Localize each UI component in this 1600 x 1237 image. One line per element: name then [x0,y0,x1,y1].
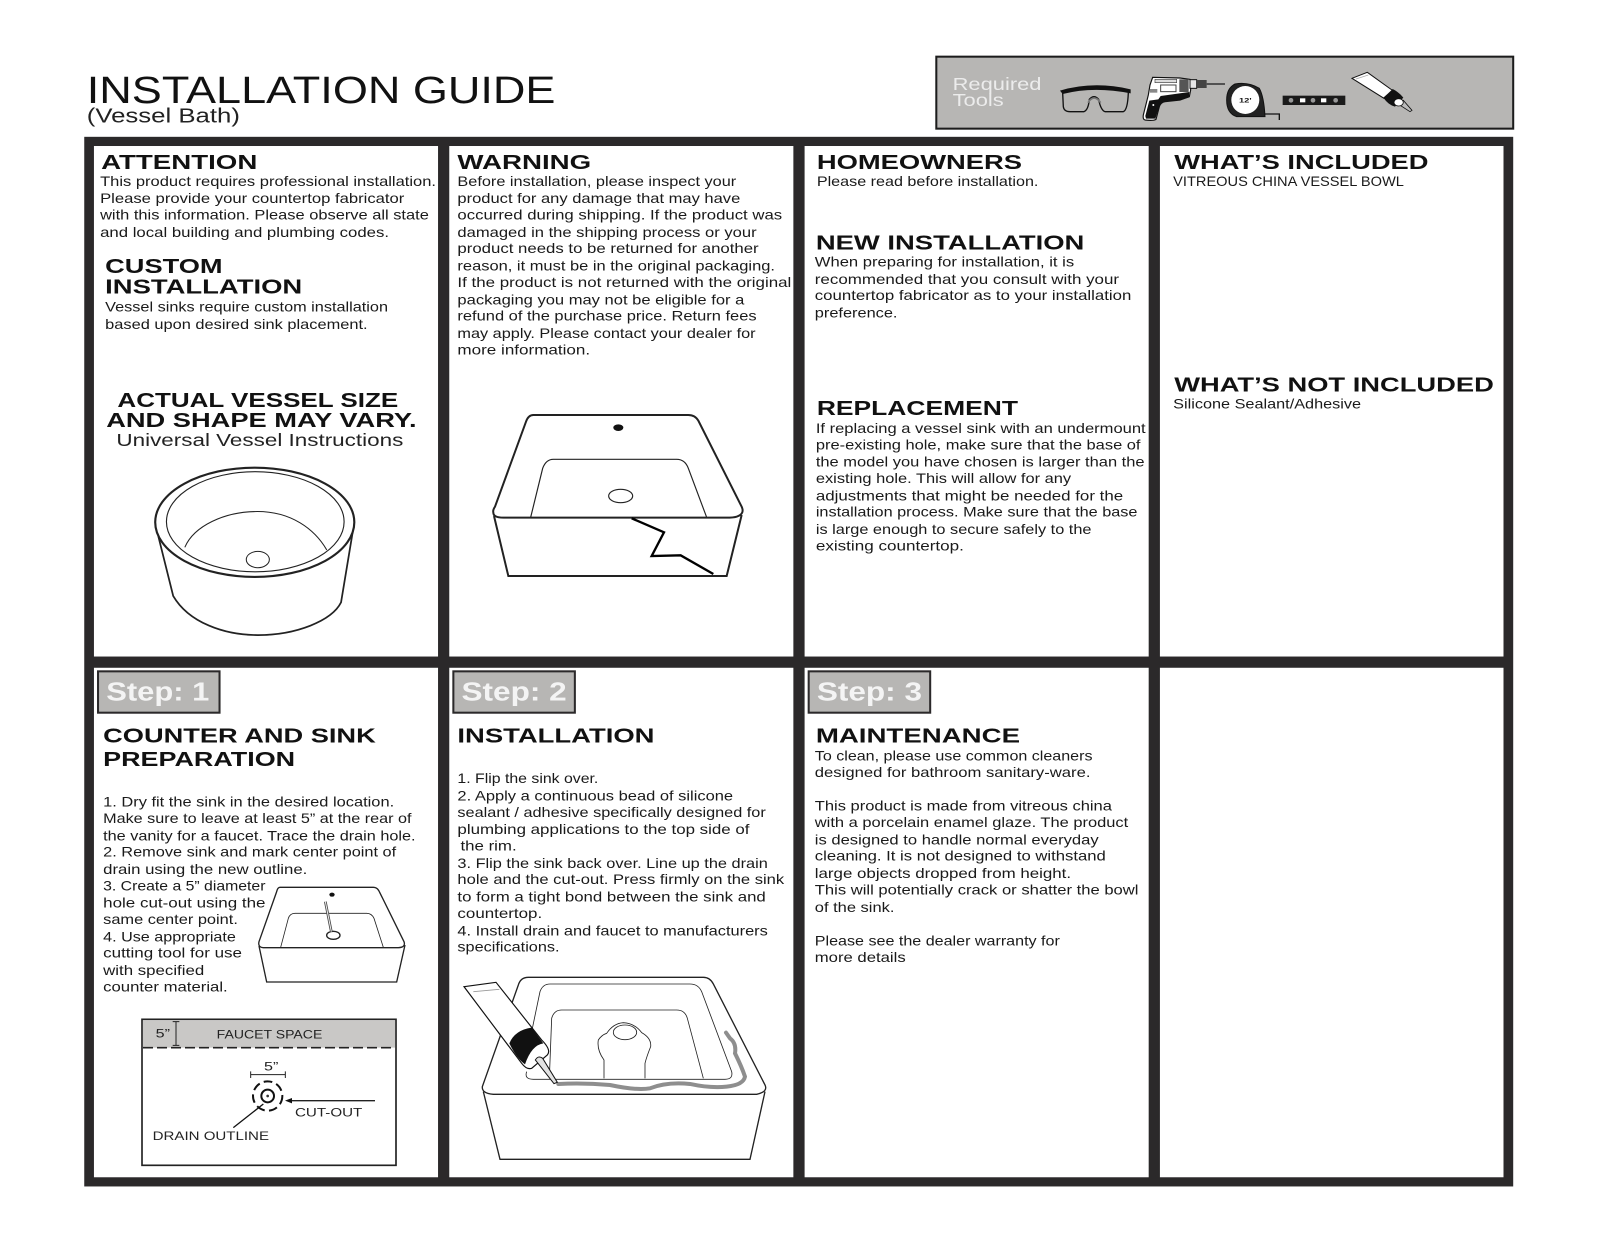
panel: step 2 [449,668,793,1177]
text: maintenance body: designed for bathroom sanitary-ware. [815,765,1090,780]
text: step 2 instructions: hole and the cut-out. Press firmly on the sink [457,872,784,887]
text: attention body: with this information. Please observe all state [99,208,429,223]
text: warning body: occurred during shipping. If the product was [457,208,782,223]
text: replacement body: If replacing a vessel sink with an undermount [816,421,1146,436]
text: included item: VITREOUS CHINA VESSEL BOWL [1173,174,1404,189]
text: attention body: and local building and plumbing codes. [100,225,389,240]
frame [84,137,1513,1186]
text: step 1 instructions: 2. Remove sink and mark center point of [103,845,396,860]
text: maintenance body: This product is made from vitreous china [815,799,1112,814]
heading: custom installation: CUSTOM [105,256,223,278]
text: step 2 instructions [457,771,784,955]
text: step 2 instructions: 1. Flip the sink over. [457,771,598,786]
text: step 1 instructions: counter material. [103,979,228,994]
badge: step 3 [809,671,930,713]
heading: what's not included: WHAT’S NOT INCLUDED [1174,374,1494,396]
text: step 1 instructions: drain using the new outline. [103,862,307,877]
text: replacement body: adjustments that might be needed for the [816,488,1123,503]
heading: actual vessel size: ACTUAL VESSEL SIZE [117,390,398,412]
panel: required tools [936,57,1513,129]
diagram: faucet space and cut-out: 5” [264,1060,278,1074]
text: warning body: Before installation, please inspect your [457,174,737,189]
heading: maintenance: MAINTENANCE [816,726,1020,748]
badge: step 3: Step: 3 [817,678,922,706]
heading: custom installation [105,256,302,298]
text: new installation body: When preparing for installation, it is [815,254,1074,269]
label: required tools: Tools [953,90,1004,110]
illustration: sink with sealant bead [482,977,766,1159]
heading: actual vessel size: AND SHAPE MAY VARY. [106,410,417,432]
text: maintenance body: is designed to handle normal everyday [815,832,1099,847]
text: warning body: damaged in the shipping process or your [457,225,757,240]
text: step 1 instructions: 3. Create a 5” diameter [103,878,266,893]
illustration: round vessel bowl [155,468,354,635]
heading: replacement: REPLACEMENT [817,398,1019,420]
heading: new installation: NEW INSTALLATION [816,233,1084,255]
badge: step 2 [453,671,575,713]
text: step 1 instructions: 4. Use appropriate [103,929,236,944]
icon: tape measure [1227,83,1279,120]
text: step 1 instructions: hole cut-out using the [103,896,265,911]
text: replacement body: the model you have chosen is larger than the [816,455,1145,470]
text: attention body [99,174,436,240]
diagram: faucet space and cut-out [142,1019,396,1165]
label: required tools: Required [953,74,1041,94]
text: maintenance body: of the sink. [815,900,894,915]
text: replacement body: installation process. Make sure that the base [816,505,1137,520]
text: maintenance body [814,749,1138,965]
text: warning body [457,174,791,357]
text: step 2 instructions: sealant / adhesive specifically designed for [457,805,766,820]
heading: custom installation: INSTALLATION [105,276,302,298]
icon: safety goggles [1060,85,1131,112]
text: warning body: refund of the purchase price. Return fees [457,309,757,324]
text: replacement body: existing countertop. [816,538,964,553]
text: homeowners note: Please read before installation. [817,174,1038,189]
title: (Vessel Bath) [87,106,240,128]
diagram: faucet space and cut-out: 5” [156,1027,170,1041]
text: step 1 instructions: same center point. [103,912,238,927]
badge: step 2: Step: 2 [462,678,567,706]
text: maintenance body: To clean, please use common cleaners [815,749,1093,764]
text: step 1 instructions: Make sure to leave at least 5” at the rear of [103,811,412,826]
text: maintenance body: cleaning. It is not designed to withstand [815,849,1106,864]
badge: step 1: Step: 1 [106,678,209,706]
text: warning body: reason, it must be in the original packaging. [457,259,775,274]
text: step 2 instructions: 2. Apply a continuous bead of silicone [457,789,733,804]
text: new installation body: countertop fabricator as to your installation [815,288,1131,303]
text: replacement body: existing hole. This will allow for any [816,471,1071,486]
title: INSTALLATION GUIDE [87,70,555,112]
badge: step 1 [98,671,220,713]
heading: counter and sink preparation: COUNTER AND SINK [103,726,376,748]
text: step 1 instructions: cutting tool for use [103,946,242,961]
heading: counter and sink preparation [103,726,376,771]
text: maintenance body: large objects dropped from height. [815,866,1071,881]
text: custom installation body: based upon desired sink placement. [105,317,368,332]
panel: warning [449,146,793,657]
panel: homeowners [805,146,1149,657]
text: step 2 instructions: countertop. [457,906,542,921]
text: warning body: If the product is not returned with the original [457,275,791,290]
text: step 1 instructions: the vanity for a faucet. Trace the drain hole. [103,828,416,843]
text: warning body: packaging you may not be eligible for a [457,292,745,307]
text: maintenance body: with a porcelain enamel glaze. The product [814,815,1128,830]
diagram: faucet space and cut-out: FAUCET SPACE [217,1027,322,1041]
icon: level [1283,96,1345,105]
panel: step 3 [805,668,1149,1177]
text: warning body: product needs to be returned for another [457,241,759,256]
text: maintenance body: This will potentially crack or shatter the bowl [815,882,1138,897]
text: warning body: may apply. Please contact your dealer for [457,326,756,341]
text: replacement body: is large enough to secure safely to the [816,522,1092,537]
text: warning body: product for any damage that may have [457,191,740,206]
text: custom installation body: Vessel sinks require custom installation [105,299,388,314]
heading: installation: INSTALLATION [457,726,655,748]
diagram: faucet space and cut-out: CUT-OUT [295,1106,363,1120]
text: step 1 instructions [102,795,416,994]
text: maintenance body: Please see the dealer warranty for [815,933,1060,948]
heading: what's included: WHAT’S INCLUDED [1174,152,1428,174]
text: warning body: more information. [457,342,590,357]
text: new installation body: preference. [815,306,898,321]
panel: step 1 [94,668,438,1177]
text: replacement body [816,421,1146,553]
icon: tape measure: 12' [1239,99,1253,105]
heading: attention: ATTENTION [101,152,257,174]
heading: actual vessel size [106,390,417,432]
panel: empty [1160,668,1504,1177]
text: replacement body: pre-existing hole, make sure that the base of [816,437,1141,452]
heading: warning: WARNING [457,152,591,174]
text: step 2 instructions: plumbing applications to the top side of [457,822,750,837]
text: attention body: This product requires professional installation. [100,174,436,189]
text: step 2 instructions: 4. Install drain and faucet to manufacturers [457,923,768,938]
text: new installation body: recommended that you consult with your [815,272,1120,287]
text: custom installation body [105,299,388,332]
diagram: faucet space and cut-out: DRAIN OUTLINE [153,1129,269,1143]
text: step 2 instructions: 3. Flip the sink back over. Line up the drain [457,856,768,871]
illustration: cracked square sink [493,415,743,576]
panel: attention [94,146,438,657]
text: universal vessel instructions: Universal Vessel Instructions [116,430,404,450]
text: step 2 instructions: to form a tight bond between the sink and [457,890,766,905]
text: new installation body [815,254,1131,321]
text: step 2 instructions: the rim. [461,839,517,854]
heading: counter and sink preparation: PREPARATION [103,749,295,771]
illustration: sink with center point marking [259,887,405,982]
text: not included item: Silicone Sealant/Adhesive [1173,396,1361,411]
text: attention body: Please provide your countertop fabricator [100,191,405,206]
label: required tools [953,74,1041,110]
icon: sealant tube [464,982,557,1084]
icon: sealant tube [1352,72,1412,112]
heading: homeowners: HOMEOWNERS [817,152,1022,174]
icon: drill [1143,77,1225,120]
panel: what's included [1160,146,1504,657]
title [87,70,555,128]
text: step 2 instructions: specifications. [457,940,560,955]
text: step 1 instructions: 1. Dry fit the sink in the desired location. [103,795,394,810]
text: maintenance body: more details [815,950,906,965]
text: step 1 instructions: with specified [102,963,204,978]
